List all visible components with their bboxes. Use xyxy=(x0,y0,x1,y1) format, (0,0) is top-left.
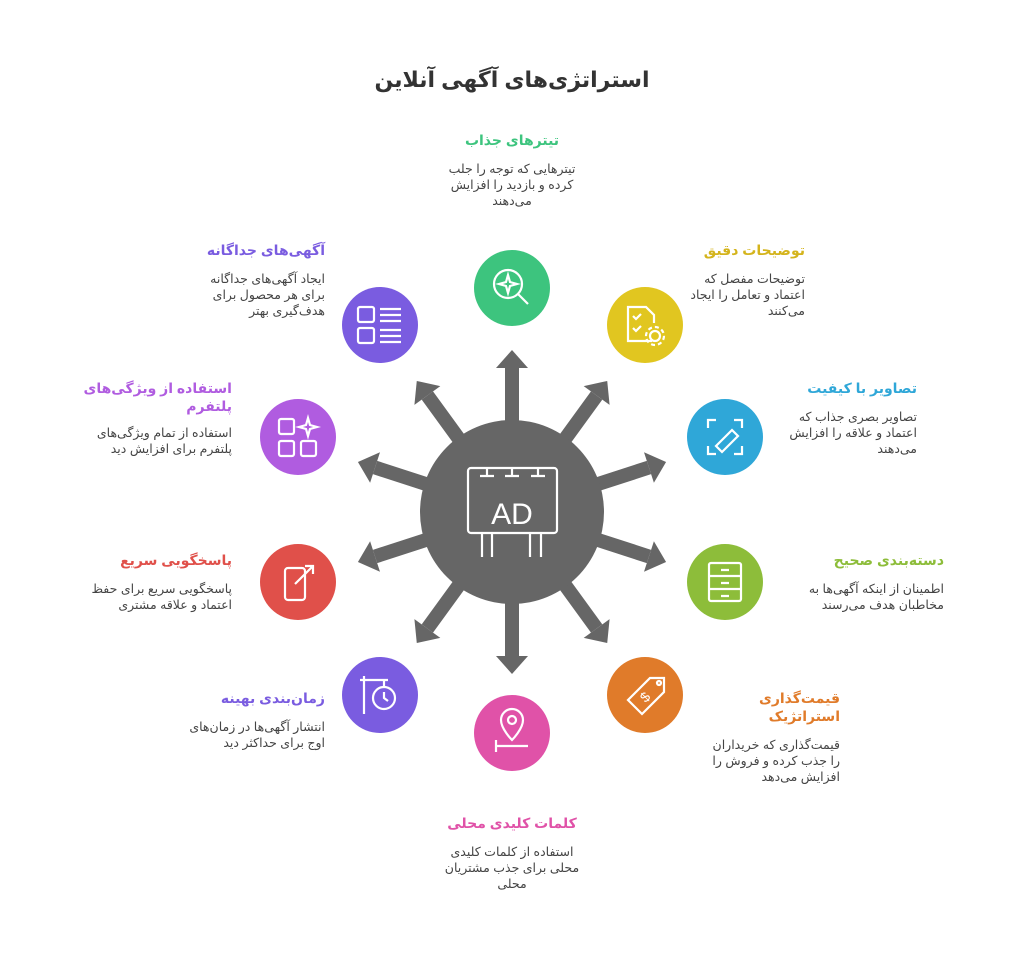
text: separate ads xyxy=(207,242,326,318)
text: local keywords: محلی برای جذب مشتریان xyxy=(445,861,579,875)
text: quality images: تصاویر با کیفیت xyxy=(807,380,917,396)
text: precise descriptions: توضیحات دقیق xyxy=(704,242,805,258)
icon: image frame (blue) xyxy=(687,399,763,475)
text: top attractive headlines: تیترهایی که توجه را جلب xyxy=(449,162,575,176)
text: fast response: اعتماد و علاقه مشتری xyxy=(118,598,232,612)
text: optimal timing: انتشار آگهی‌ها در زمان‌های xyxy=(189,720,325,734)
text: top attractive headlines: کرده و بازدید را افزایش xyxy=(451,178,573,192)
center hub: AD billboard: AD xyxy=(491,498,533,531)
text: fast response xyxy=(91,552,232,612)
text: platform features: استفاده از تمام ویژگی‌های xyxy=(97,426,232,440)
text: precise descriptions xyxy=(690,242,805,318)
text: optimal timing: اوج برای حداکثر دید xyxy=(223,736,325,750)
icon: apps grid (violet) xyxy=(260,399,336,475)
icon: phone arrow (red) xyxy=(260,544,336,620)
title: استراتژی‌های آگهی آنلاین xyxy=(374,67,650,92)
text: strategic pricing: را جذب کرده و فروش را xyxy=(712,754,840,768)
text: separate ads: آگهی‌های جداگانه xyxy=(207,242,325,258)
text: optimal timing xyxy=(189,690,325,750)
text: quality images: تصاویر بصری جذاب که xyxy=(799,410,917,424)
icon: document gear (yellow) xyxy=(607,287,683,363)
text: platform features: پلتفرم برای افزایش دید xyxy=(111,442,232,456)
text: precise descriptions: اعتماد و تعامل را ایجاد xyxy=(690,288,805,302)
text: quality images: اعتماد و علاقه را افزایش xyxy=(789,426,917,440)
icon: price tag (orange): $ xyxy=(637,688,654,705)
text: optimal timing: زمان‌بندی بهینه xyxy=(221,690,325,706)
text: proper categorization: مخاطبان هدف می‌رسند xyxy=(822,598,944,612)
text: proper categorization: اطمینان از اینکه آگهی‌ها به xyxy=(809,582,944,596)
text: precise descriptions: می‌کنند xyxy=(768,304,805,318)
text: platform features: استفاده از ویژگی‌های xyxy=(84,380,232,396)
icon: cabinet (lime) xyxy=(687,544,763,620)
icon: price tag (orange) xyxy=(607,657,683,733)
text: precise descriptions: توضیحات مفصل که xyxy=(704,272,805,286)
text: separate ads: برای هر محصول برای xyxy=(213,288,325,302)
text: platform features: پلتفرم xyxy=(186,398,232,414)
text: separate ads: هدف‌گیری بهتر xyxy=(249,304,325,318)
text: separate ads: ایجاد آگهی‌های جداگانه xyxy=(210,272,325,286)
text: strategic pricing: قیمت‌گذاری xyxy=(759,690,840,706)
text: local keywords: محلی xyxy=(497,877,527,891)
arrows xyxy=(353,350,671,674)
text: quality images: می‌دهند xyxy=(877,442,917,456)
text: top attractive headlines: می‌دهند xyxy=(492,194,532,208)
icon: list (purple) xyxy=(342,287,418,363)
text: local keywords: استفاده از کلمات کلیدی xyxy=(450,845,574,859)
text: strategic pricing: افزایش می‌دهد xyxy=(761,770,840,784)
icon: search (green) xyxy=(474,250,550,326)
text: proper categorization xyxy=(809,552,944,612)
icon: timer sign (purple) xyxy=(342,657,418,733)
center hub: AD billboard xyxy=(420,420,604,604)
text: top attractive headlines xyxy=(449,132,575,208)
text: proper categorization: دسته‌بندی صحیح xyxy=(834,552,944,568)
text: fast response: پاسخگویی سریع xyxy=(120,552,232,568)
text: strategic pricing: قیمت‌گذاری که خریداران xyxy=(713,738,840,752)
text: quality images xyxy=(789,380,917,456)
text: platform features xyxy=(84,380,232,456)
text: fast response: پاسخگویی سریع برای حفظ xyxy=(91,582,232,596)
text: local keywords: کلمات کلیدی محلی xyxy=(447,815,577,831)
text: strategic pricing xyxy=(712,690,840,784)
icon: location pin (pink) xyxy=(474,695,550,771)
text: top attractive headlines: تیترهای جذاب xyxy=(465,132,559,148)
text: local keywords xyxy=(445,815,579,891)
text: strategic pricing: استراتژیک xyxy=(769,708,840,724)
